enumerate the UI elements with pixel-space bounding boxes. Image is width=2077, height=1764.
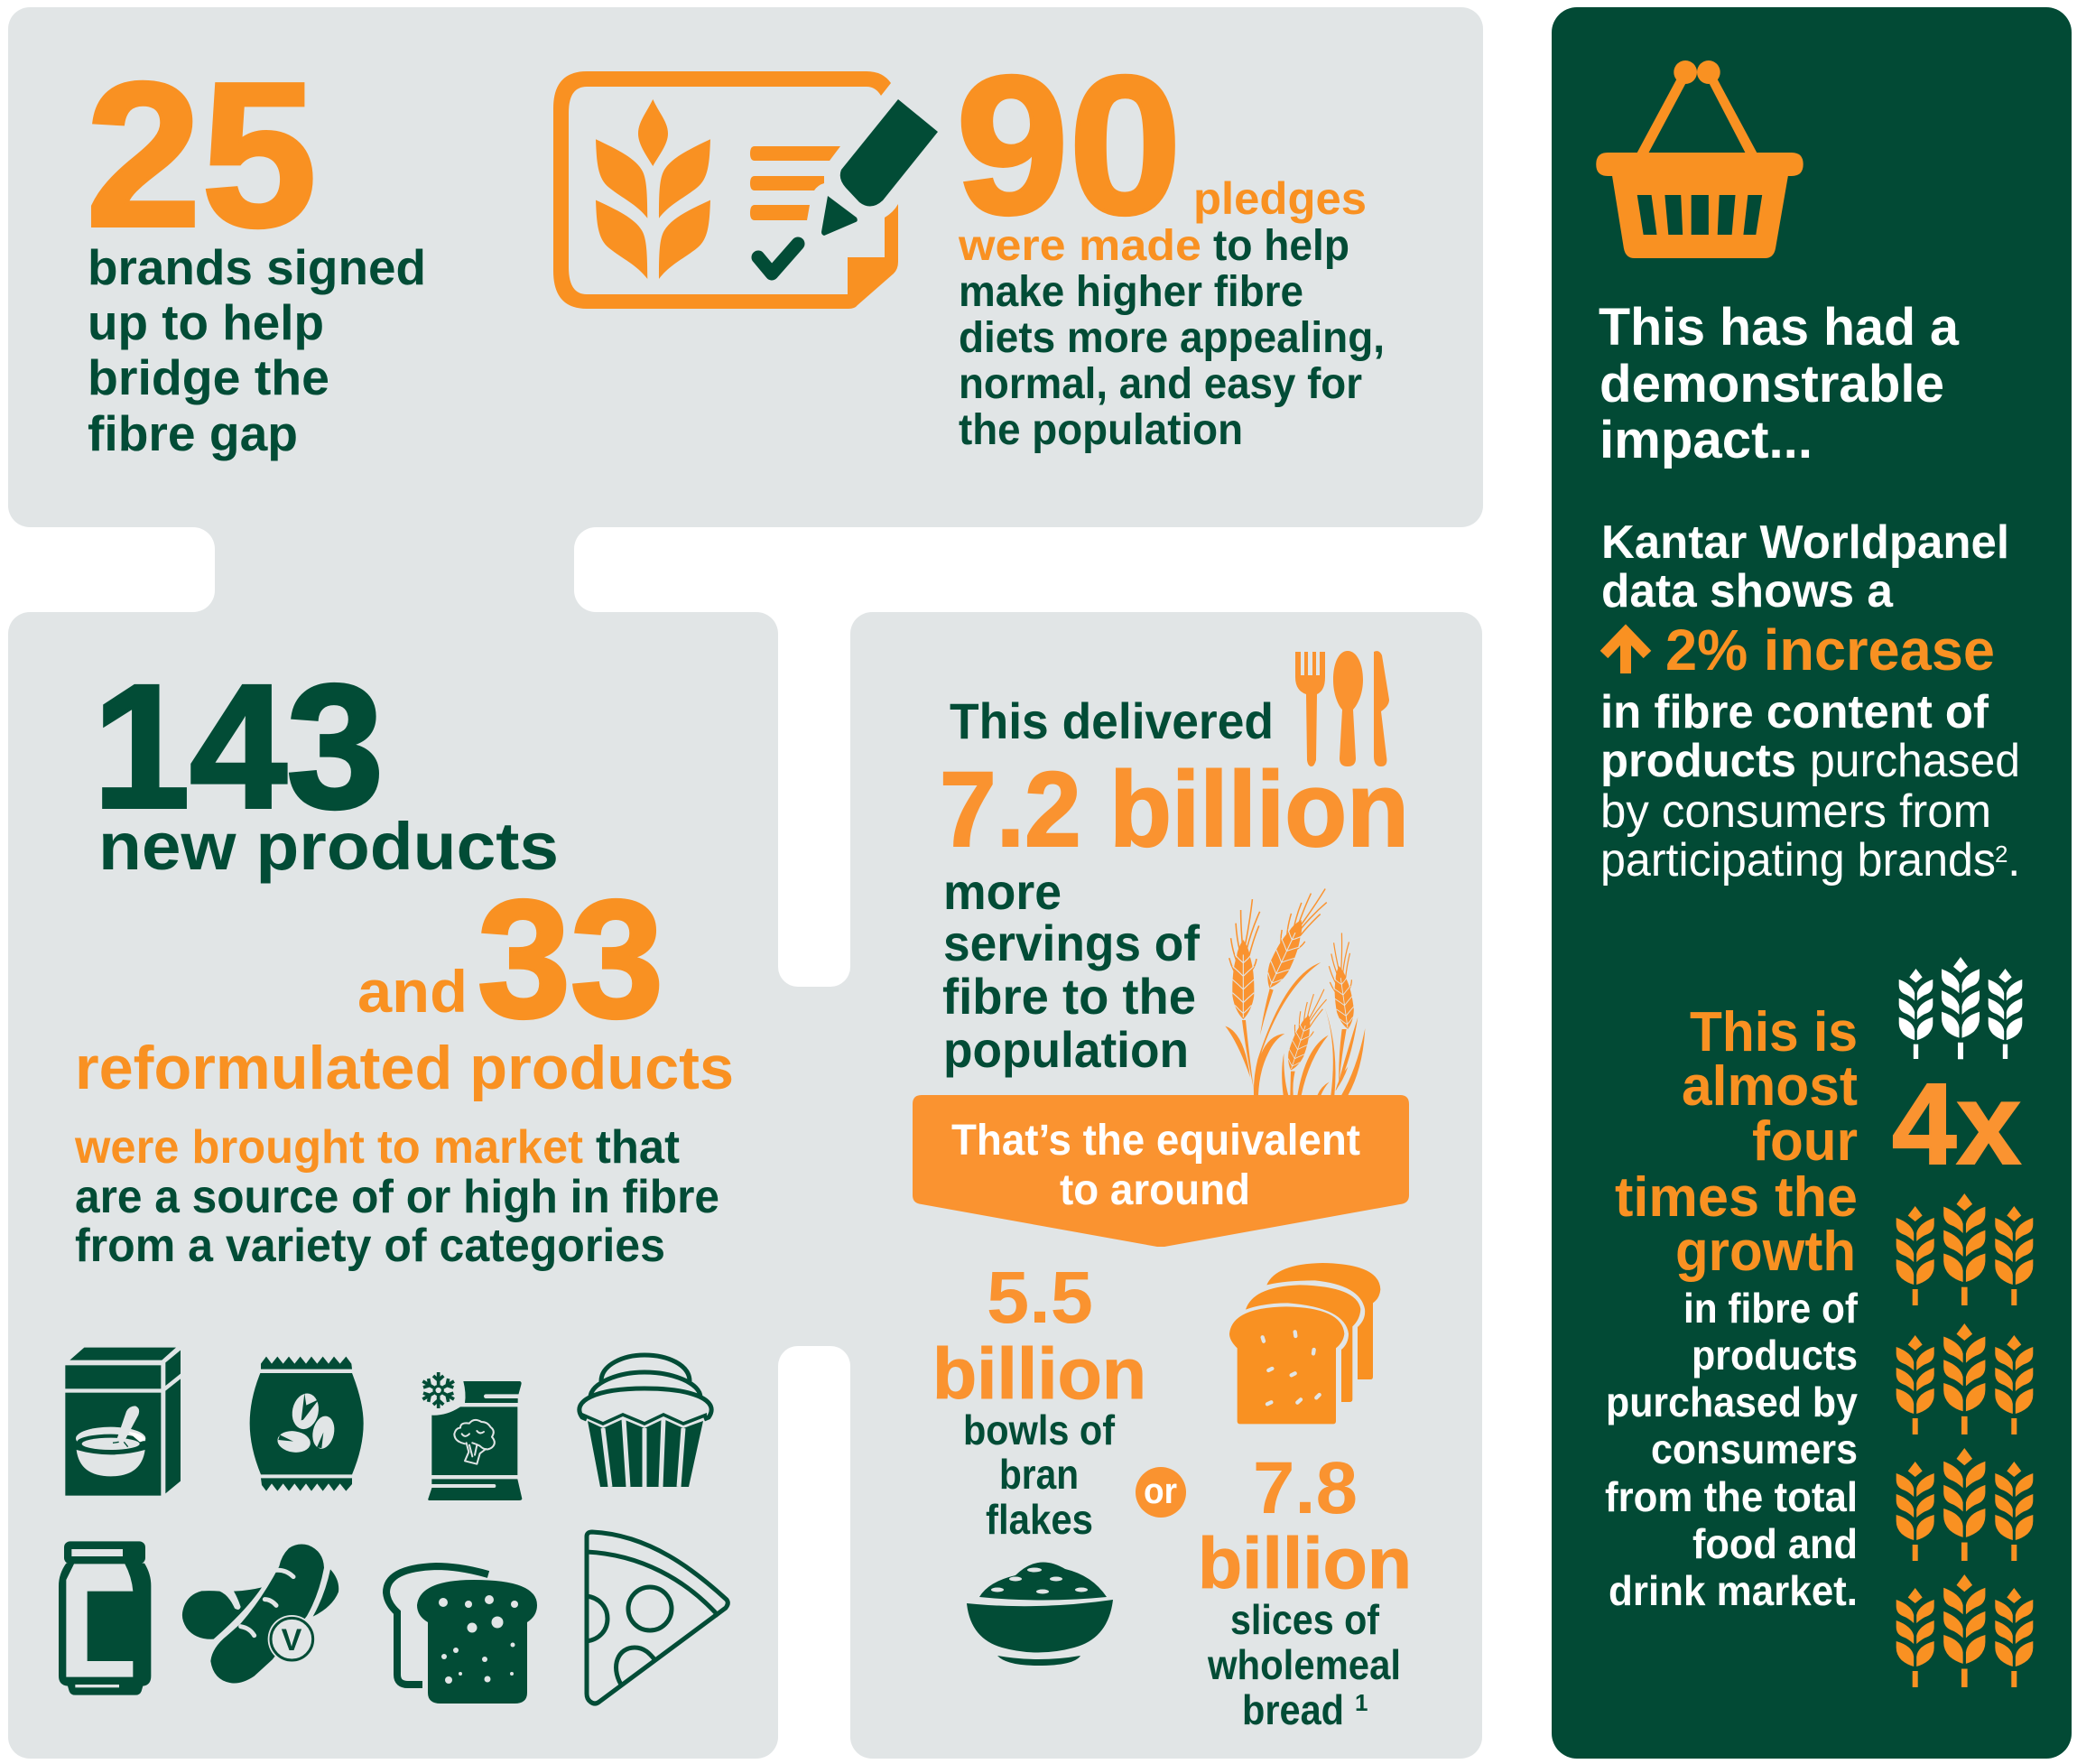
stat: 5.5 billion bowls: billion	[932, 1333, 1146, 1414]
icon: shopping basket	[1596, 60, 1803, 258]
icon: sliced bread	[1229, 1263, 1380, 1424]
text: brought to market: are a source of or high in fibre	[75, 1171, 719, 1223]
text: fibre content of products: 2	[1995, 840, 2007, 868]
text: Kantar Worldpanel data: data shows a	[1601, 565, 1894, 617]
stat: 143 new products	[93, 648, 559, 884]
stat: 7.8 billion slices: billion	[1198, 1523, 1412, 1603]
icon: frozen vegetable bag	[421, 1372, 522, 1500]
stat: 25 brands: up to help	[88, 294, 324, 350]
text: fibre content of products: participating brands	[1600, 834, 1996, 887]
stat: 143 new products: 143	[93, 648, 384, 845]
text: growth in fibre of products	[1605, 1285, 1859, 1614]
text: fibre content of products: purchased	[1810, 735, 2020, 787]
icons: white wheat row	[1899, 957, 2022, 1059]
callout: equivalent banner: That’s the equivalent	[951, 1117, 1360, 1165]
heading: demonstrable impact: demonstrable	[1599, 355, 1944, 413]
heading: demonstrable impact: impact...	[1599, 411, 1813, 469]
text: more servings of fibre	[942, 863, 1200, 1078]
stat: 90 pledges	[956, 36, 1385, 454]
stat: 7.8 billion slices	[1198, 1447, 1412, 1733]
stat: 25 brands: fibre gap	[88, 405, 298, 461]
stat: 5.5 billion bowls	[932, 1257, 1146, 1543]
icon: pizza slice	[587, 1532, 728, 1704]
text: growth in fibre of products: purchased by	[1606, 1379, 1858, 1425]
icon: muffin	[580, 1355, 711, 1487]
text: almost four times the growth	[1615, 1001, 1858, 1283]
stat: 7.8 billion slices: wholemeal	[1207, 1641, 1401, 1688]
text: Kantar Worldpanel data: Kantar Worldpanel	[1601, 516, 2009, 569]
text: growth in fibre of products: drink market.	[1609, 1567, 1858, 1614]
stat: 25 brands	[86, 41, 426, 461]
text: Kantar Worldpanel data	[1601, 516, 2009, 617]
stat: 2% increase: 2% increase	[1665, 617, 1995, 682]
panel: dark green impact column	[1552, 7, 2072, 1759]
text: growth in fibre of products: in fibre of	[1683, 1285, 1859, 1332]
text: almost four times the growth: growth	[1675, 1221, 1856, 1283]
text: more servings of fibre: servings of	[943, 914, 1200, 971]
text: brought to market: were brought to market	[74, 1121, 583, 1174]
icon: or badge: or	[1144, 1472, 1177, 1511]
text: growth in fibre of products: food and	[1692, 1520, 1858, 1567]
stat: 25 brands: bridge the	[88, 349, 329, 405]
stat: 90 pledges: to help	[1213, 222, 1349, 270]
stat: 7.8 billion slices: 7.8	[1253, 1447, 1358, 1529]
stat: 25 brands: brands signed	[88, 239, 426, 295]
text: growth in fibre of products: consumers	[1651, 1425, 1858, 1472]
text: almost four times the growth: times the	[1615, 1166, 1858, 1229]
text: fibre content of products: products	[1600, 735, 1796, 787]
stat: 143 new products: new products	[98, 809, 559, 884]
icon: cereal box	[65, 1348, 181, 1496]
text: more servings of fibre: more	[943, 863, 1062, 920]
icon: drink bottle	[59, 1541, 151, 1695]
text: this delivered: This delivered	[950, 692, 1274, 749]
stat: 7.2 billion: 7.2 billion	[940, 750, 1409, 869]
stat: 90 pledges: were made	[958, 222, 1201, 270]
stat: 4x: 4x	[1892, 1060, 2021, 1189]
icon: vegetarian sausages	[182, 1545, 338, 1684]
text: almost four times the growth: almost	[1682, 1055, 1858, 1118]
icon: loaf of bread slices	[386, 1566, 537, 1704]
text: brought to market: that	[596, 1121, 680, 1174]
stat: 5.5 billion bowls: 5.5	[987, 1257, 1093, 1339]
stat: 33 reformulated products: and	[357, 958, 468, 1025]
stat: 90 pledges: normal, and easy for	[959, 360, 1362, 408]
stat: 7.8 billion slices: slices of	[1230, 1596, 1380, 1643]
stat: 25 brands: 25	[86, 41, 317, 270]
text: more servings of fibre: population	[943, 1021, 1189, 1078]
text: growth in fibre of products: products	[1692, 1332, 1858, 1379]
callout: equivalent banner: to around	[1060, 1166, 1250, 1214]
stat: 90 pledges: 90	[956, 36, 1182, 255]
text: brought to market	[74, 1121, 719, 1272]
icons: orange wheat rows	[1896, 1193, 2033, 1687]
stat: 90 pledges: make higher fibre	[959, 268, 1303, 316]
text: fibre content of products: by consumers from	[1600, 785, 1991, 838]
icon: nut snack bag	[250, 1357, 364, 1491]
icon: or badge	[1136, 1467, 1186, 1518]
stat: 33 reformulated products	[75, 867, 734, 1102]
text: fibre content of products: in fibre content of	[1600, 686, 1989, 738]
stat: 90 pledges: pledges	[1193, 173, 1367, 224]
icon: wheat stalks	[1225, 879, 1365, 1095]
stat: 5.5 billion bowls: bowls of	[963, 1407, 1116, 1453]
icon: pledge document with wheat and pen	[553, 71, 938, 309]
text: almost four times the growth: four	[1752, 1110, 1858, 1173]
icon: up arrow	[1604, 632, 1647, 673]
stat: 5.5 billion bowls: flakes	[986, 1496, 1093, 1543]
stat: 5.5 billion bowls: bran	[999, 1451, 1079, 1498]
stat: 33 reformulated products: 33	[478, 867, 663, 1053]
stat: 90 pledges: the population	[959, 406, 1243, 454]
stat: 33 reformulated products: reformulated products	[75, 1034, 734, 1102]
stat: 7.8 billion slices: 1	[1355, 1689, 1368, 1716]
text: almost four times the growth: This is	[1690, 1001, 1858, 1063]
heading: demonstrable impact: This has had a	[1599, 298, 1960, 357]
callout: equivalent banner	[913, 1095, 1409, 1247]
text: growth in fibre of products: from the total	[1605, 1473, 1858, 1520]
text: fibre content of products	[1600, 686, 2020, 887]
background panels: grey connected panels	[0, 7, 1531, 1764]
text: fibre content of products: .	[2007, 834, 2020, 887]
stat: 7.8 billion slices: bread	[1242, 1686, 1344, 1733]
icon: vegetarian sausages: V	[282, 1623, 302, 1657]
text: brought to market: from a variety of categories	[75, 1220, 665, 1272]
stat: 90 pledges: diets more appealing,	[959, 314, 1385, 362]
heading: demonstrable impact	[1599, 298, 1960, 469]
text: more servings of fibre: fibre to the	[942, 968, 1196, 1025]
icon: cutlery	[1295, 651, 1389, 766]
icon: bowl of bran flakes	[967, 1562, 1113, 1666]
